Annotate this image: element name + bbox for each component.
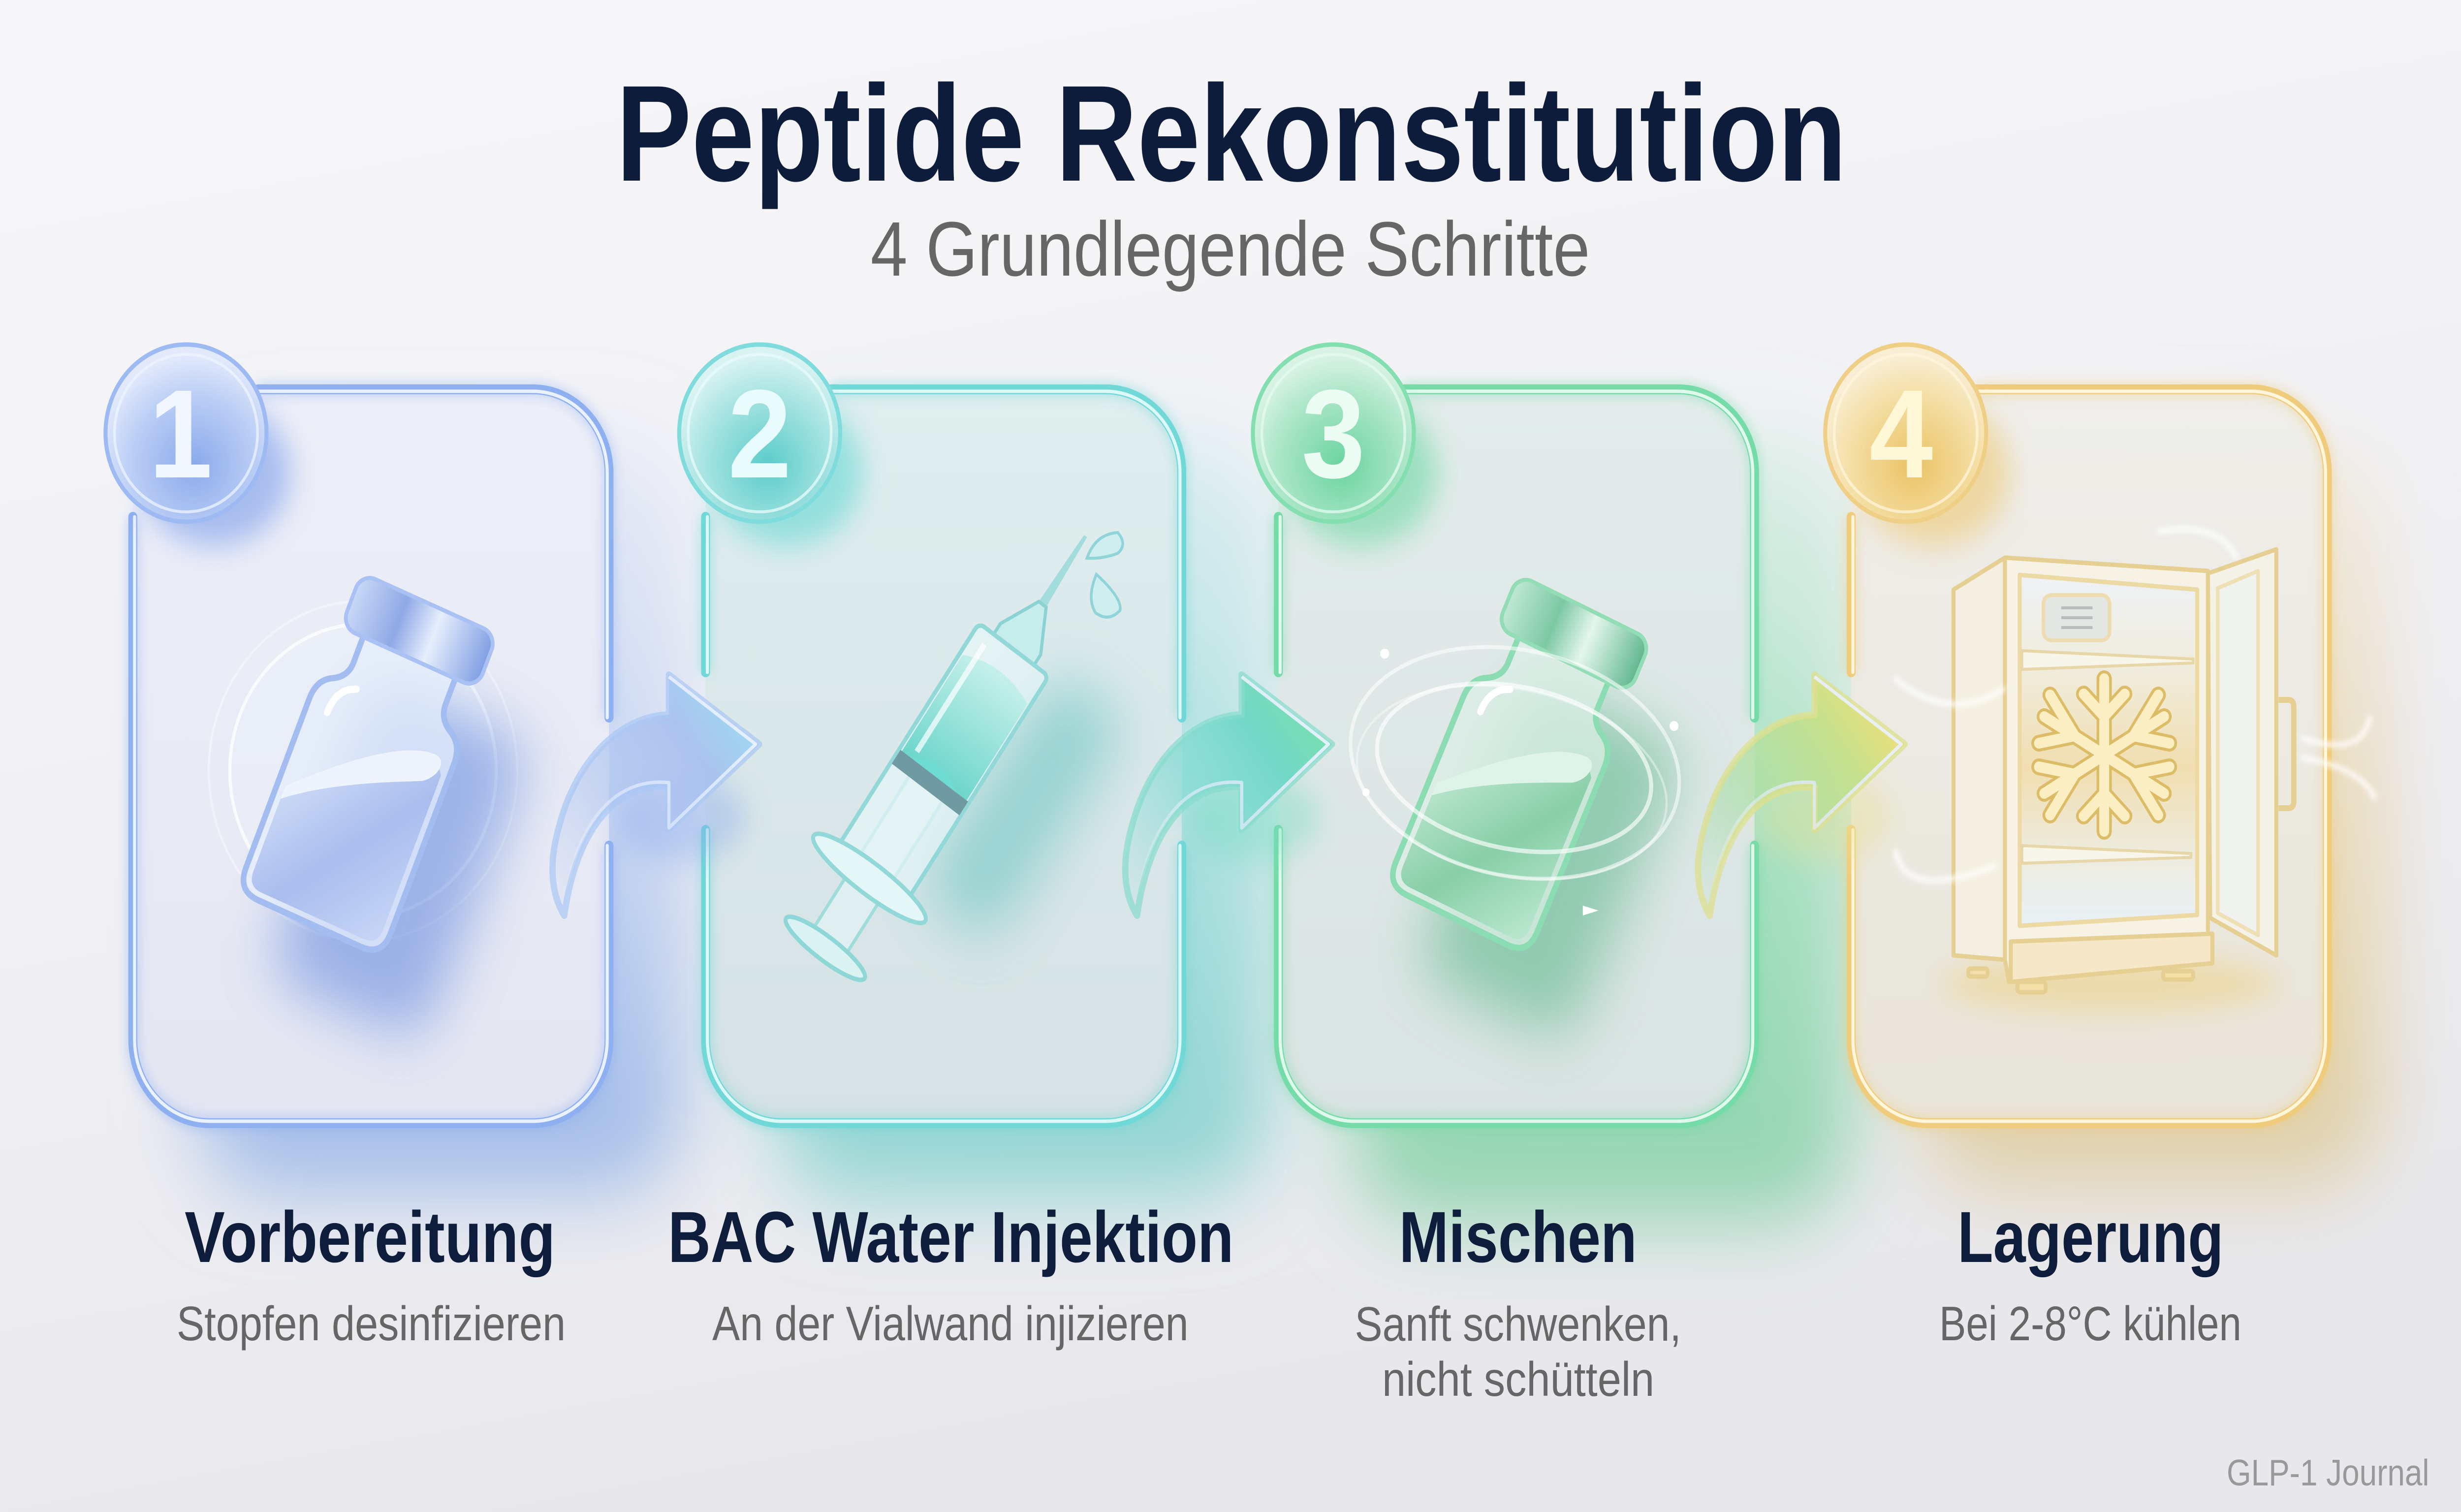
cold air wisps xyxy=(1896,530,2374,881)
arrow 1 to 2 xyxy=(552,675,759,915)
icon: open fridge with snowflake xyxy=(1896,530,2374,1014)
icon: vial being swirled xyxy=(1334,572,1696,1046)
icon: vial with powder xyxy=(209,571,535,1046)
panel: step 4 card xyxy=(1851,389,2327,1123)
fridge body xyxy=(1954,549,2294,992)
number badge 1 xyxy=(105,345,290,546)
step 3 description: Sanft schwenken, xyxy=(1355,1297,1681,1351)
step 4 description: Bei 2-8°C kühlen xyxy=(1939,1296,2241,1351)
subtitle: 4 Grundlegende Schritte xyxy=(871,206,1590,292)
step 3 heading: Mischen xyxy=(1399,1197,1637,1277)
number badge 1: 1 xyxy=(149,364,213,504)
number badge 4: 4 xyxy=(1869,364,1933,504)
step 1 description: Stopfen desinfizieren xyxy=(177,1296,566,1351)
step 4 heading: Lagerung xyxy=(1957,1197,2224,1277)
panel: step 1 card xyxy=(133,389,609,1123)
step 2 heading: BAC Water Injektion xyxy=(668,1197,1233,1277)
step 3 description: nicht schütteln xyxy=(1382,1352,1654,1406)
number badge 3 xyxy=(1253,345,1438,546)
number badge 3: 3 xyxy=(1301,364,1365,504)
step 3 description xyxy=(1355,1297,1681,1406)
fridge shelves xyxy=(2022,651,2193,863)
number badge 2: 2 xyxy=(728,364,791,504)
card shadows and colour glows xyxy=(197,433,2383,1221)
step 1 heading: Vorbereitung xyxy=(185,1197,555,1277)
icon: syringe xyxy=(763,493,1141,1001)
number badge 4 xyxy=(1825,345,2010,546)
arrow 2 to 3 xyxy=(1125,675,1332,915)
source credit: GLP-1 Journal xyxy=(2227,1452,2429,1494)
fridge fan vent xyxy=(2044,595,2110,640)
panel: step 2 card xyxy=(706,389,1182,1123)
number badge 2 xyxy=(679,345,863,546)
arrow 3 to 4 xyxy=(1698,675,1905,915)
icon: snowflake xyxy=(2039,679,2170,831)
title: Peptide Rekonstitution xyxy=(616,58,1847,211)
step 2 description: An der Vialwand injizieren xyxy=(712,1296,1189,1351)
panel: step 3 card xyxy=(1278,389,1755,1123)
